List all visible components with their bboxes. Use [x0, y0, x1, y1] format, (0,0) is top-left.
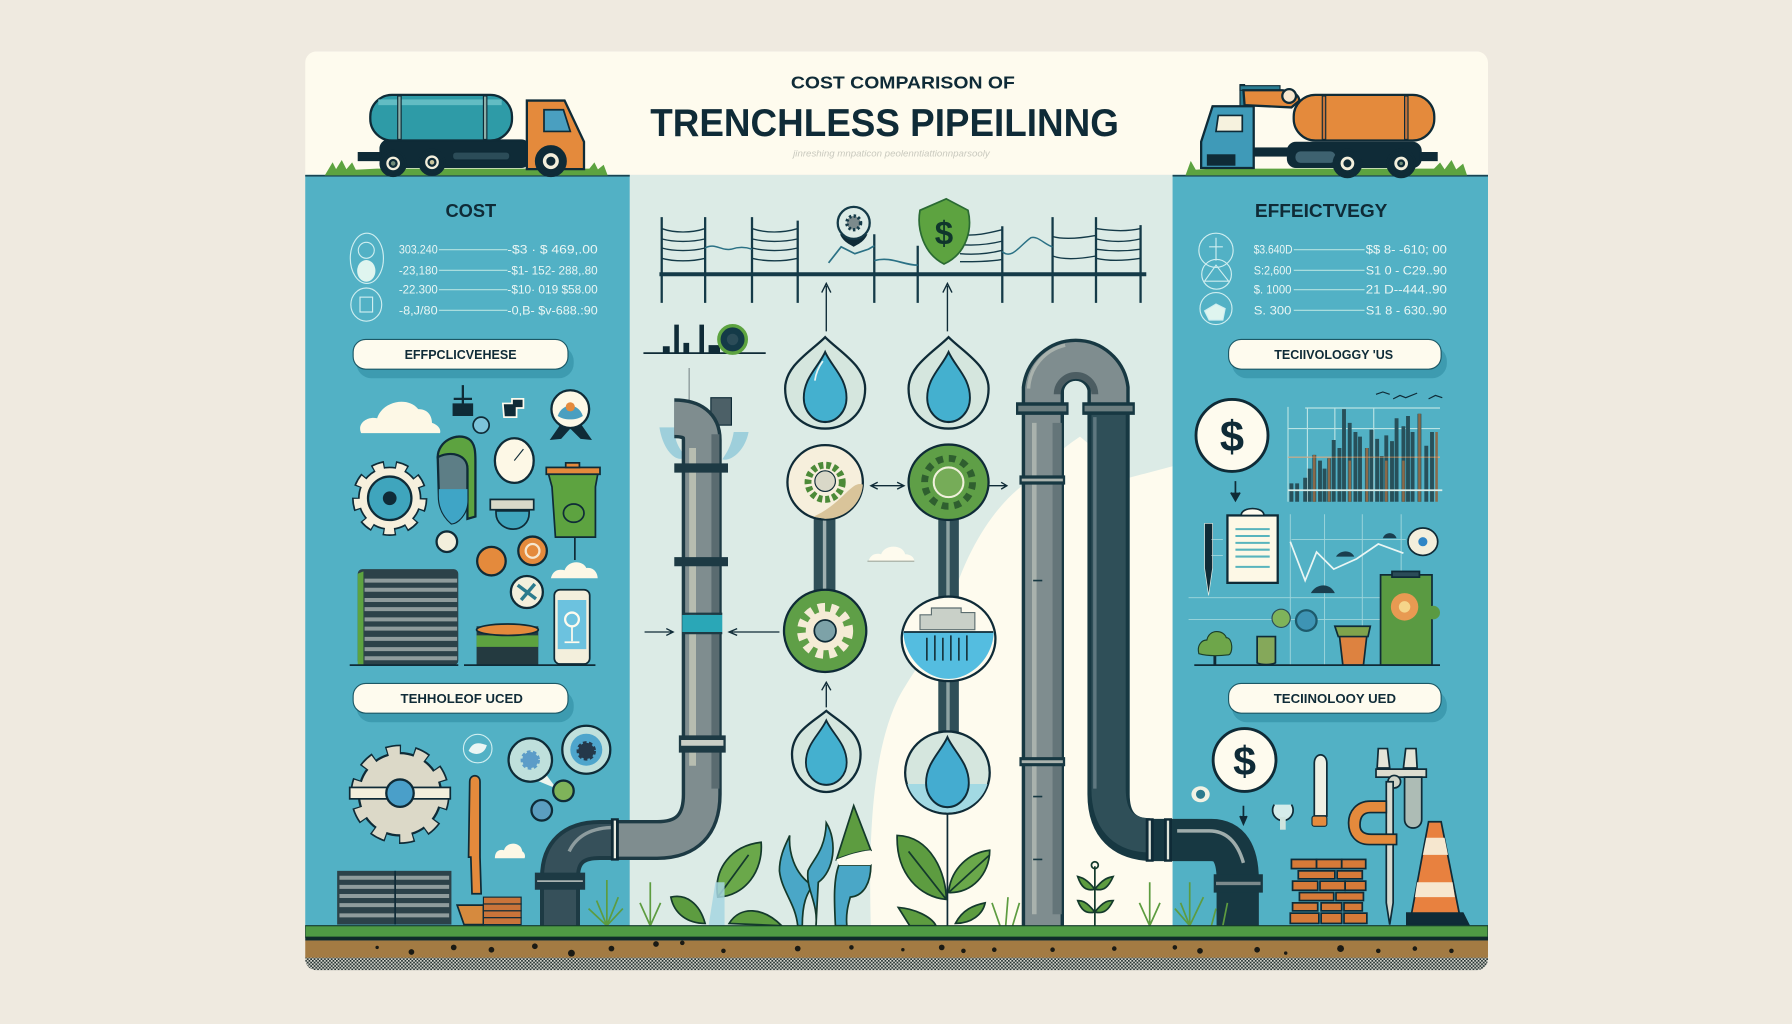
grass strip	[305, 926, 1488, 937]
icon: tube	[1312, 755, 1327, 826]
icon: brick wall	[1290, 859, 1367, 923]
icon: drum	[477, 624, 538, 665]
cost price list: 303.240	[399, 243, 438, 257]
node: lower drop badge	[792, 711, 861, 792]
icon: small tower	[454, 385, 472, 415]
icon: flower pot	[1335, 626, 1370, 665]
cost price list	[350, 233, 598, 321]
subtitle: jinreshing mnpaticon peolenntiattionnparsooly	[791, 149, 991, 159]
plant: blue flowers	[779, 806, 871, 926]
node: lower drop circle	[905, 731, 990, 814]
icon: jar	[1257, 637, 1275, 665]
icon: wrench badge	[511, 576, 543, 608]
icon: small cloud	[551, 562, 598, 578]
arrows between columns	[645, 283, 1007, 707]
icon: medal	[550, 390, 592, 440]
process column left	[784, 337, 866, 792]
icon: gauge	[495, 438, 534, 483]
node: gear sand circle	[787, 445, 863, 519]
process column right	[902, 337, 995, 926]
icon: cup	[490, 499, 534, 529]
pill: technology used left: TEHHOLEOF UCED	[401, 692, 523, 706]
effectiveness price list: S1 0 - C29..90	[1366, 263, 1447, 277]
soil layer	[305, 941, 1488, 959]
effectiveness price list: $3.640D	[1254, 243, 1293, 257]
effectiveness price list: 21 D--444..90	[1366, 283, 1447, 297]
icon: dollar shield	[919, 199, 969, 264]
icon: globe dot	[531, 800, 552, 821]
icon: faucet	[1273, 805, 1293, 830]
arrow: up right	[943, 283, 952, 331]
effectiveness price list: S1 8 - 630..90	[1366, 303, 1447, 317]
arrow: double	[871, 482, 904, 489]
pill: technology right upper	[1229, 339, 1447, 378]
node: green gear circle	[909, 445, 989, 520]
plant: small sprouts	[1078, 862, 1113, 926]
icon: gear	[359, 467, 421, 529]
icon: coil stack	[358, 569, 458, 665]
icon: pipe tool	[1349, 749, 1426, 925]
pipe: thin left	[535, 368, 749, 928]
icon: large gear	[350, 753, 450, 835]
pill: effectiveness	[353, 339, 574, 378]
icon: capsule	[438, 437, 475, 523]
icon: blue circle	[1296, 610, 1317, 631]
cost list icons	[350, 233, 383, 321]
pill: technology right upper: TECIIVOLOGGY 'US	[1274, 348, 1393, 362]
pill: technology used left	[353, 683, 574, 722]
ground	[305, 926, 1488, 970]
icon: orange tool	[457, 776, 483, 925]
plant: grass tufts	[589, 880, 1227, 926]
icon: clipboard	[1227, 509, 1278, 583]
pill: technology right lower: TECIINOLOOY UED	[1274, 692, 1396, 706]
plants	[589, 806, 1227, 926]
title line: cost comparison: COST COMPARISON OF	[791, 73, 1015, 93]
arrow: down	[1240, 806, 1247, 824]
pipe collars	[674, 468, 728, 562]
cost price list: -22.300	[399, 283, 438, 297]
effectiveness price list: S:2,600	[1254, 263, 1292, 277]
truck grass	[326, 161, 607, 175]
bar chart	[1288, 392, 1442, 502]
stems	[938, 514, 959, 926]
icon: small bricks	[483, 897, 521, 925]
icon: copper coin	[477, 547, 506, 575]
truck grass	[1186, 161, 1466, 175]
icon: small ellipse	[1191, 786, 1210, 802]
icon: green board	[1381, 571, 1440, 665]
effectiveness price list: $. 1000	[1254, 283, 1292, 297]
cost price list: -23,180	[399, 263, 438, 277]
icon: small cloud	[495, 844, 525, 858]
fence wires	[662, 229, 1141, 262]
node: water drop badge	[909, 337, 989, 429]
heading: effectiveness: EFFEICTVEGY	[1255, 200, 1387, 221]
pill: effectiveness: EFFPCLICVEHESE	[405, 348, 517, 362]
icon: eye dial	[1408, 528, 1438, 555]
fence main line	[659, 273, 1146, 276]
arrow: to pipe left	[645, 629, 673, 635]
icon: dollar badge	[1196, 399, 1268, 471]
icon: cloud	[360, 402, 440, 433]
header band	[305, 51, 1488, 175]
splash behind pipe	[659, 427, 749, 460]
arrow: up left	[822, 283, 831, 331]
panel: right teal	[1173, 175, 1488, 929]
arrow: up lower	[822, 682, 831, 707]
icon: speech bubble gear	[509, 738, 557, 789]
icon: small plant with ring	[643, 325, 766, 353]
title	[650, 73, 1119, 159]
plant: large right	[897, 835, 990, 926]
effectiveness list icons	[1199, 233, 1233, 325]
soil stones	[375, 941, 1454, 957]
stem	[814, 514, 835, 594]
icon: orange tanker crane truck	[1186, 85, 1466, 177]
icon: outlined bubble	[463, 734, 492, 763]
fence posts	[662, 217, 1141, 303]
cost price list: -8,J/80	[399, 303, 438, 317]
cost price list: -0,B- $v-688.:90	[507, 303, 598, 317]
cost price list: -$3 · $ 469,.00	[507, 243, 598, 257]
icon: green dot	[553, 781, 574, 801]
plant: left leaf	[671, 842, 782, 926]
panel: centre background	[630, 175, 1173, 929]
left panel icon cluster: efficiency	[350, 385, 600, 665]
icon: green circle	[1272, 609, 1290, 627]
arch collars	[1016, 403, 1135, 414]
icon: small circle	[437, 531, 457, 552]
cost price list: -$1- 152- 288,.80	[507, 263, 598, 277]
effectiveness price list: $$ 8- -610; 00	[1366, 243, 1447, 257]
icon: small blocks	[503, 399, 523, 417]
left panel icon cluster: technology	[337, 726, 610, 925]
pill: technology right lower	[1229, 683, 1447, 722]
icon: small cloud	[867, 547, 914, 561]
node: water scene circle	[902, 597, 995, 681]
heading: cost: COST	[445, 200, 496, 221]
icon: pen	[1205, 523, 1213, 595]
effectiveness price list: S. 300	[1254, 303, 1292, 317]
right panel icon cluster: chart	[1189, 392, 1442, 665]
effectiveness price list	[1199, 233, 1447, 325]
icon: dollar badge: $	[1233, 738, 1256, 784]
node: water drop badge	[785, 337, 865, 429]
node: green gear circle	[784, 590, 866, 672]
pipe: large arch	[1016, 345, 1263, 928]
icon: teal tanker truck	[326, 95, 607, 176]
icon: dollar shield: $	[935, 216, 953, 253]
icon: copper ring	[518, 537, 547, 565]
icon: phone	[554, 590, 590, 664]
title line: trenchless: TRENCHLESS PIPEILINNG	[650, 102, 1119, 145]
icon: dollar badge: $	[1220, 413, 1244, 461]
dithered bottom band	[305, 958, 1488, 970]
icon: tree	[1198, 632, 1232, 665]
icon: traffic cone	[1407, 822, 1469, 925]
icon: dollar badge	[1213, 729, 1276, 791]
icon: small gear pin	[838, 207, 870, 247]
icon: speech bubble virus	[562, 726, 610, 774]
right panel icon cluster: tools	[1191, 729, 1469, 925]
diagram: fence network	[659, 217, 1146, 303]
cost price list: -$10· 019 $58.00	[507, 283, 598, 297]
infographic card	[305, 51, 1488, 970]
icon: green bin	[546, 463, 600, 560]
line chart	[1189, 514, 1406, 665]
icon: coils	[337, 871, 451, 925]
arrow: down	[1231, 481, 1240, 501]
panel: left teal	[305, 175, 630, 929]
fence waves	[705, 237, 1053, 254]
arrow: to pipe right	[729, 629, 779, 635]
arrow: right	[989, 482, 1007, 489]
icon: dot	[473, 417, 489, 433]
